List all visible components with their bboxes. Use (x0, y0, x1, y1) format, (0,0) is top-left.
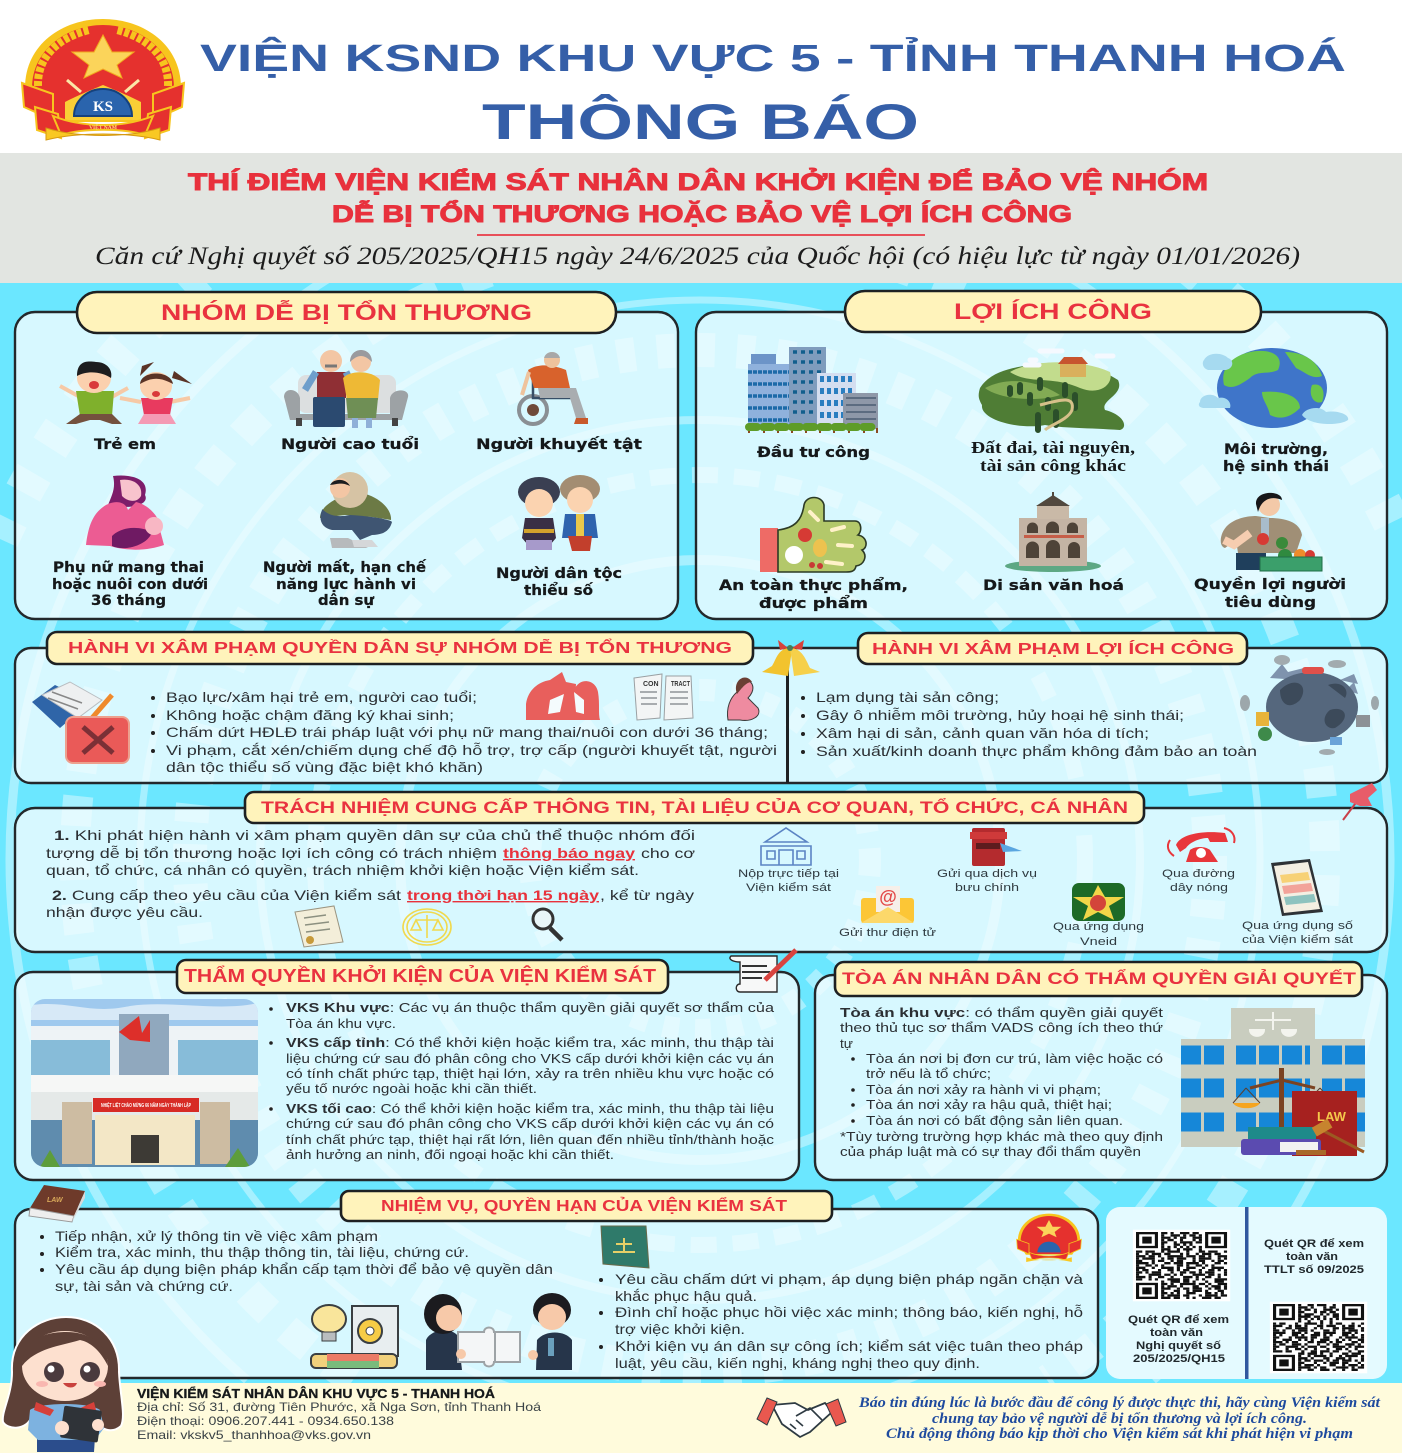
text block: Tòa án khu vực : có thẩm quyền giải quyết (840, 1006, 1164, 1020)
text block: tính chất phức tạp, thiệt hại rất lớn, liên quan đến nhiều tỉnh/thành hoặc (286, 1133, 774, 1147)
text block: VKS cấp tỉnh : Có thể khởi kiện hoặc kiểm tra, xác minh, thu thập tài (286, 1036, 774, 1050)
labels: tiêu dùng (1225, 595, 1316, 611)
icon: elderly couple (284, 350, 408, 428)
bulleted list: khắc phục hậu quả. (615, 1288, 757, 1304)
text block: VKS tối cao : Có thể khởi kiện hoặc kiểm tra, xác minh, thu thập tài liệu (286, 1102, 774, 1116)
text block: 1. Khi phát hiện hành vi xâm phạm quyền dân sự của chủ thể thuộc nhóm đối (54, 827, 695, 843)
bulleted list: Yêu cầu chấm dứt vi phạm, áp dụng biện pháp ngăn chặn và (615, 1271, 1083, 1287)
caption: Quét QR để xem (1264, 1238, 1364, 1250)
contact block: Điện thoại: 0906.207.441 - 0934.650.138 (137, 1414, 395, 1428)
icon: polluted planet (1240, 655, 1379, 755)
icon: land and hills (979, 351, 1124, 430)
channel: postal (937, 828, 1037, 894)
channel: hotline: dây nóng (1170, 882, 1228, 894)
heading pill (245, 792, 1144, 823)
text block: liệu chứng cứ sau đó phân công cho VKS cấp dưới khởi kiện các vụ án (286, 1052, 774, 1066)
text block: 2. Cung cấp theo yêu cầu của Viện kiểm sát (52, 887, 401, 903)
icon: bell (762, 640, 820, 676)
label: Di sản văn hoá (983, 578, 1124, 594)
QR code 2 (1270, 1302, 1367, 1373)
channel: procuracy app: Qua ứng dụng số (1242, 920, 1354, 932)
bulleted list: Gây ô nhiễm môi trường, hủy hoại hệ sinh thái; (816, 707, 1184, 723)
labels: hoặc nuôi con dưới (52, 577, 208, 593)
text block: thông báo ngay (503, 845, 635, 861)
labels: Người mất, hạn chế (263, 559, 427, 576)
bulleted list: Xâm hại di sản, cảnh quan văn hóa di tích; (816, 725, 1149, 741)
text block: Tòa án nơi xảy ra hậu quả, thiệt hại; (866, 1098, 1112, 1112)
text block: yếu tố nước ngoài hoặc khi cần thiết. (286, 1082, 537, 1096)
channel: at the procuracy (738, 828, 839, 894)
header: emblem: KS (93, 99, 113, 115)
channel: vneid app (1053, 883, 1144, 948)
text block: tượng dễ bị tổn thương hoặc lợi ích công có trách nhiệm (46, 845, 497, 861)
icon: pregnant woman (727, 678, 759, 720)
icon: law book (29, 1185, 85, 1222)
text block (46, 827, 695, 920)
channel: email: Gửi thư điện tử (839, 927, 936, 939)
caption (1264, 1238, 1364, 1276)
text block: quan, tổ chức, cá nhân có quyền, trách nhiệm khởi kiện hoặc Viện kiểm sát. (46, 862, 639, 878)
bulleted list (40, 1228, 553, 1294)
text block: ảnh hưởng an ninh, đối ngoại hoặc khi cần thiết. (286, 1148, 614, 1162)
labels: 36 tháng (91, 593, 166, 609)
labels (1223, 442, 1329, 475)
text block: theo thủ tục sơ thẩm VADS công ích theo thứ (840, 1021, 1164, 1035)
illustration: court building with scales: LAW (1317, 1109, 1347, 1124)
text block: cho cơ (641, 845, 695, 861)
panel: nhiệm vụ, quyền hạn (15, 1185, 1098, 1378)
closing message: Chủ động thông báo kịp thời cho Viện kiểm sát khi phát hiện vi phạm (886, 1426, 1353, 1442)
heading pill (177, 960, 668, 993)
icon: idea and gear (311, 1305, 398, 1368)
labels: tài sản công khác (980, 456, 1127, 475)
icon: pin (1343, 783, 1377, 820)
heading pill (77, 292, 616, 333)
contact block: Email: vkskv5_thanhhoa@vks.gov.vn (137, 1428, 371, 1442)
caption: Nghị quyết số (1136, 1340, 1221, 1352)
icon: green law book (601, 1226, 649, 1268)
text block: Tòa án khu vực. (286, 1017, 396, 1031)
contact block (137, 1386, 542, 1442)
text block: chứng cứ sau đó phân công cho VKS cấp dưới khởi kiện các vụ án có (286, 1117, 774, 1131)
text block: , kể từ ngày (600, 887, 694, 903)
text block: Tòa án nơi xảy ra hành vi vi phạm; (866, 1083, 1101, 1097)
labels: Môi trường, (1224, 442, 1328, 458)
label: Người khuyết tật (476, 436, 642, 453)
icon: law book: LAW (47, 1197, 64, 1204)
bulleted list (151, 689, 777, 775)
label: Người cao tuổi (281, 436, 419, 453)
bulleted list: Kiểm tra, xác minh, thu thập thông tin, tài liệu, chứng cứ. (55, 1244, 469, 1260)
footer (0, 1383, 1402, 1453)
labels (52, 560, 208, 609)
channel: email: @ (879, 887, 897, 907)
labels (263, 559, 427, 609)
labels: Đất đai, tài nguyên, (971, 438, 1135, 457)
labels: Phụ nữ mang thai (53, 560, 204, 576)
panel: trách nhiệm cung cấp thông tin (15, 783, 1387, 952)
icon: wheelchair user (519, 352, 588, 424)
icon: earth (1199, 348, 1348, 428)
labels (971, 438, 1135, 475)
channel: vneid app: Vneid (1080, 936, 1117, 948)
icon: magnifier (533, 909, 562, 940)
heading pill (858, 633, 1247, 664)
labels: được phẩm (759, 595, 868, 612)
caption: Quét QR để xem (1128, 1314, 1229, 1326)
channel: hotline (1162, 828, 1235, 894)
character: chibi prosecutor girl (3, 1317, 123, 1452)
heading pill: TÒA ÁN NHÂN DÂN CÓ THẨM QUYỀN GIẢI QUYẾT (842, 969, 1357, 988)
icon: food thumbs up (760, 498, 866, 572)
heading pill: TRÁCH NHIỆM CUNG CẤP THÔNG TIN, TÀI LIỆU CỦA CƠ QUAN, TỔ CHỨC, CÁ NHÂN (261, 798, 1128, 817)
panel: lợi ích công (696, 291, 1387, 619)
heading pill (341, 1191, 832, 1221)
channel: postal: Gửi qua dịch vụ (937, 868, 1037, 880)
subtitle band: DỄ BỊ TỔN THƯƠNG HOẶC BẢO VỆ LỢI ÍCH CÔNG (332, 199, 1072, 228)
bulleted list (599, 1271, 1083, 1371)
text block: nhận được yêu cầu. (46, 904, 203, 920)
text block: trong thời hạn 15 ngày (407, 887, 599, 903)
panel: hành vi xâm phạm (15, 632, 1387, 783)
closing message: chung tay bảo vệ người dễ bị tổn thương và lợi ích công. (932, 1411, 1307, 1427)
subtitle band: THÍ ĐIỂM VIỆN KIỂM SÁT NHÂN DÂN KHỞI KIỆN ĐỂ BẢO VỆ NHÓM (188, 167, 1208, 196)
icon: distressed person (320, 472, 392, 548)
icon: nursing mother (86, 476, 164, 550)
bulleted list: trợ việc khởi kiện. (615, 1321, 745, 1337)
channel: at the procuracy: Nộp trực tiếp tại (738, 868, 839, 880)
icon: ethnic minority people (518, 475, 600, 551)
bulleted list: Yêu cầu áp dụng biện pháp khẩn cấp tạm thời để bảo vệ quyền dân (55, 1261, 553, 1277)
closing message: Báo tin đúng lúc là bước đầu để công lý được thực thi, hãy cùng Viện kiểm sát (858, 1395, 1381, 1411)
icon: children (60, 362, 192, 424)
icon: consumer with basket (1221, 493, 1322, 571)
label: Đầu tư công (757, 444, 870, 461)
channel: hotline: Qua đường (1162, 868, 1235, 880)
text block (840, 1006, 1164, 1159)
bulleted list: Sản xuất/kinh doanh thực phẩm không đảm bảo an toàn (816, 743, 1257, 759)
icon: heritage temple (1005, 492, 1101, 572)
heading pill: HÀNH VI XÂM PHẠM LỢI ÍCH CÔNG (872, 639, 1234, 658)
labels: năng lực hành vi (276, 577, 416, 593)
channel: vneid app: Qua ứng dụng (1053, 921, 1144, 933)
text block: trở nếu là tổ chức; (866, 1067, 991, 1081)
contact block: Địa chỉ: Số 31, đường Tiên Phước, xã Nga Sơn, tỉnh Thanh Hoá (137, 1400, 542, 1414)
labels (496, 566, 622, 599)
subtitle band (0, 153, 1402, 283)
panel: QR codes (1106, 1207, 1387, 1379)
text block: tự (840, 1037, 854, 1051)
caption: 205/2025/QH15 (1133, 1353, 1225, 1365)
icon: public buildings (748, 347, 878, 433)
emblem small (1017, 1214, 1081, 1262)
title: VIỆN KSND KHU VỰC 5 - TỈNH THANH HOÁ (200, 36, 1346, 80)
icon: conflict faces (526, 672, 600, 720)
caption: toàn văn (1286, 1251, 1338, 1263)
icon: scales seal (403, 909, 451, 945)
panel: nhóm dễ bị tổn thương (15, 292, 678, 619)
heading pill (845, 291, 1261, 332)
panel: thẩm quyền khởi kiện (15, 950, 799, 1180)
bulleted list: Khởi kiện vụ án dân sự công ích; kiểm sát việc tuân theo pháp (615, 1338, 1083, 1354)
label: Trẻ em (94, 437, 156, 453)
bulleted list: Vi phạm, cắt xén/chiếm dụng chế độ hỗ trợ, trợ cấp (người khuyết tật, người (166, 742, 777, 758)
caption: toàn văn (1150, 1327, 1203, 1339)
subtitle band: Căn cứ Nghị quyết số 205/2025/QH15 ngày 24/6/2025 của Quốc hội (có hiệu lực từ ngày 01/01/2026) (95, 243, 1300, 270)
closing message (858, 1395, 1381, 1442)
bulleted list: luật, yêu cầu, kiến nghị, kháng nghị theo quy định. (615, 1355, 980, 1371)
bulleted list: Lạm dụng tài sản công; (816, 689, 999, 705)
text block (269, 1001, 774, 1162)
icon: stacked documents with X (32, 682, 129, 763)
icon: scroll and pen (730, 950, 796, 992)
icon: business people with puzzle (424, 1293, 572, 1370)
text block: Tòa án nơi có bất động sản liên quan. (866, 1114, 1123, 1128)
contact block: VIỆN KIỂM SÁT NHÂN DÂN KHU VỰC 5 - THANH HOÁ (137, 1386, 496, 1401)
caption (1128, 1314, 1229, 1365)
bulleted list: Tiếp nhận, xử lý thông tin về việc xâm phạm (55, 1228, 378, 1244)
heading pill: LỢI ÍCH CÔNG (954, 299, 1152, 324)
icon: handshake (757, 1398, 846, 1437)
heading pill: THẨM QUYỀN KHỞI KIỆN CỦA VIỆN KIỂM SÁT (184, 965, 656, 986)
bulleted list: Chấm dứt HĐLĐ trái pháp luật với phụ nữ mang thai/nuôi con dưới 36 tháng; (166, 724, 768, 740)
heading pill: NHÓM DỄ BỊ TỔN THƯƠNG (161, 299, 532, 325)
photo: procuracy building (31, 999, 258, 1167)
channel: email (839, 886, 936, 939)
channel: postal: bưu chính (955, 882, 1019, 894)
channel: procuracy app: của Viện kiểm sát (1242, 934, 1354, 946)
labels: thiểu số (524, 582, 593, 599)
heading pill: NHIỆM VỤ, QUYỀN HẠN CỦA VIỆN KIỂM SÁT (381, 1197, 788, 1215)
heading pill (47, 632, 753, 664)
text block: Tòa án nơi bị đơn cư trú, làm việc hoặc có (866, 1052, 1163, 1066)
labels: An toàn thực phẩm, (719, 577, 908, 594)
panel: tòa án nhân dân (815, 962, 1387, 1180)
labels: dân sự (318, 593, 375, 609)
text block: của pháp luật mà có sự thay đổi thẩm quyền (840, 1145, 1141, 1159)
bulleted list: Bạo lực/xâm hại trẻ em, người cao tuổi; (166, 689, 477, 705)
icon: certificate (295, 906, 343, 947)
bulleted list: Không hoặc chậm đăng ký khai sinh; (166, 707, 454, 723)
caption: TTLT số 09/2025 (1264, 1264, 1364, 1276)
heading pill (835, 962, 1362, 996)
bulleted list (801, 689, 1257, 759)
labels: hệ sinh thái (1223, 459, 1329, 475)
labels: Quyền lợi người (1194, 576, 1346, 593)
heading pill: HÀNH VI XÂM PHẠM QUYỀN DÂN SỰ NHÓM DỄ BỊ TỔN THƯƠNG (68, 638, 732, 657)
QR code 1 (1133, 1230, 1230, 1301)
channel: procuracy app (1242, 859, 1354, 946)
labels (719, 577, 908, 612)
photo: procuracy building: NHIỆT LIỆT CHÀO MỪNG 66 NĂM NGÀY THÀNH LẬP (101, 1101, 191, 1109)
bulleted list: dân tộc thiểu số vùng đặc biệt khó khăn) (166, 759, 483, 775)
text block: VKS Khu vực : Các vụ án thuộc thẩm quyền giải quyết sơ thẩm của (286, 1001, 774, 1015)
bulleted list: sự, tài sản và chứng cứ. (55, 1278, 233, 1294)
icon: torn contract: CON (643, 681, 659, 688)
heading: thông báo: THÔNG BÁO (482, 93, 919, 150)
illustration: court building with scales (1181, 1008, 1365, 1156)
labels (1194, 576, 1346, 611)
text block: *Tùy tường trường hợp khác mà theo quy định (840, 1130, 1163, 1144)
text block: có tính chất phức tạp, thiệt hại lớn, xảy ra trên nhiều khu vực hoặc có (286, 1067, 774, 1081)
icon: torn contract: TRACT (671, 681, 691, 688)
header: emblem: VIỆT NAM (89, 123, 118, 131)
icon: torn contract (634, 674, 693, 720)
bulleted list: Đình chỉ hoặc phục hồi việc xác minh; thông báo, kiến nghị, hỗ (615, 1304, 1083, 1320)
header: emblem (22, 19, 184, 140)
labels: Người dân tộc (496, 566, 622, 582)
channel: at the procuracy: Viện kiểm sát (746, 882, 832, 894)
